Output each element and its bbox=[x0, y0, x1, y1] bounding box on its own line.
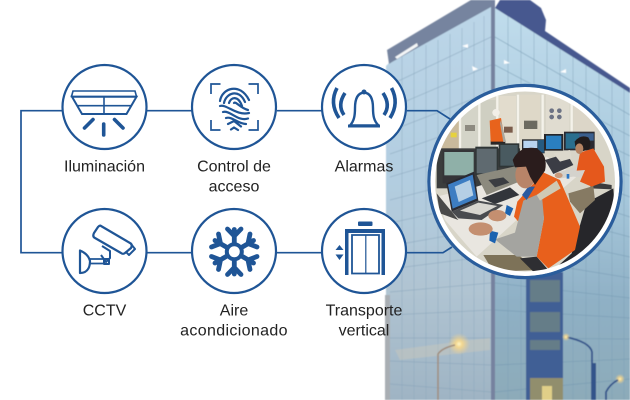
building photo bbox=[385, 0, 630, 400]
seated worker right bbox=[568, 186, 595, 213]
background worker bbox=[491, 140, 505, 145]
keyboards bbox=[482, 187, 519, 204]
node: Aire acondicionado bbox=[180, 209, 288, 340]
node: Iluminación bbox=[62, 65, 146, 176]
node: Control de acceso bbox=[192, 65, 276, 196]
reflections and street lamps bbox=[395, 338, 490, 360]
node: CCTV bbox=[62, 209, 146, 320]
node: Aire acondicionado: acondicionado bbox=[180, 322, 288, 340]
label: CCTV bbox=[83, 302, 127, 320]
label: Control de bbox=[197, 158, 271, 176]
seated worker front bbox=[483, 255, 532, 271]
node: Transporte vertical bbox=[322, 209, 406, 340]
icon: snowflake bbox=[212, 229, 257, 274]
desk bbox=[437, 157, 577, 257]
label: Aire bbox=[220, 302, 248, 320]
label: Alarmas bbox=[335, 158, 393, 176]
cabinets bbox=[442, 120, 459, 148]
dark glass column bbox=[526, 272, 563, 400]
node: Transporte vertical: vertical bbox=[339, 322, 389, 340]
building roof bbox=[387, 0, 491, 64]
label: Iluminación bbox=[64, 158, 145, 176]
photo: control room bbox=[427, 84, 623, 280]
icon: alarm bell bbox=[333, 88, 395, 126]
icon: ceiling light bbox=[72, 91, 136, 135]
label: Transporte bbox=[326, 302, 402, 320]
laptop bbox=[446, 172, 478, 212]
node: Alarmas bbox=[322, 65, 406, 176]
node: Control de acceso: acceso bbox=[209, 178, 259, 196]
icon: elevator bbox=[336, 222, 385, 275]
icon: security camera bbox=[80, 226, 135, 273]
chair bbox=[559, 188, 614, 265]
icon: fingerprint bbox=[211, 84, 258, 130]
connector lines bbox=[21, 111, 452, 253]
monitors bbox=[437, 148, 520, 188]
